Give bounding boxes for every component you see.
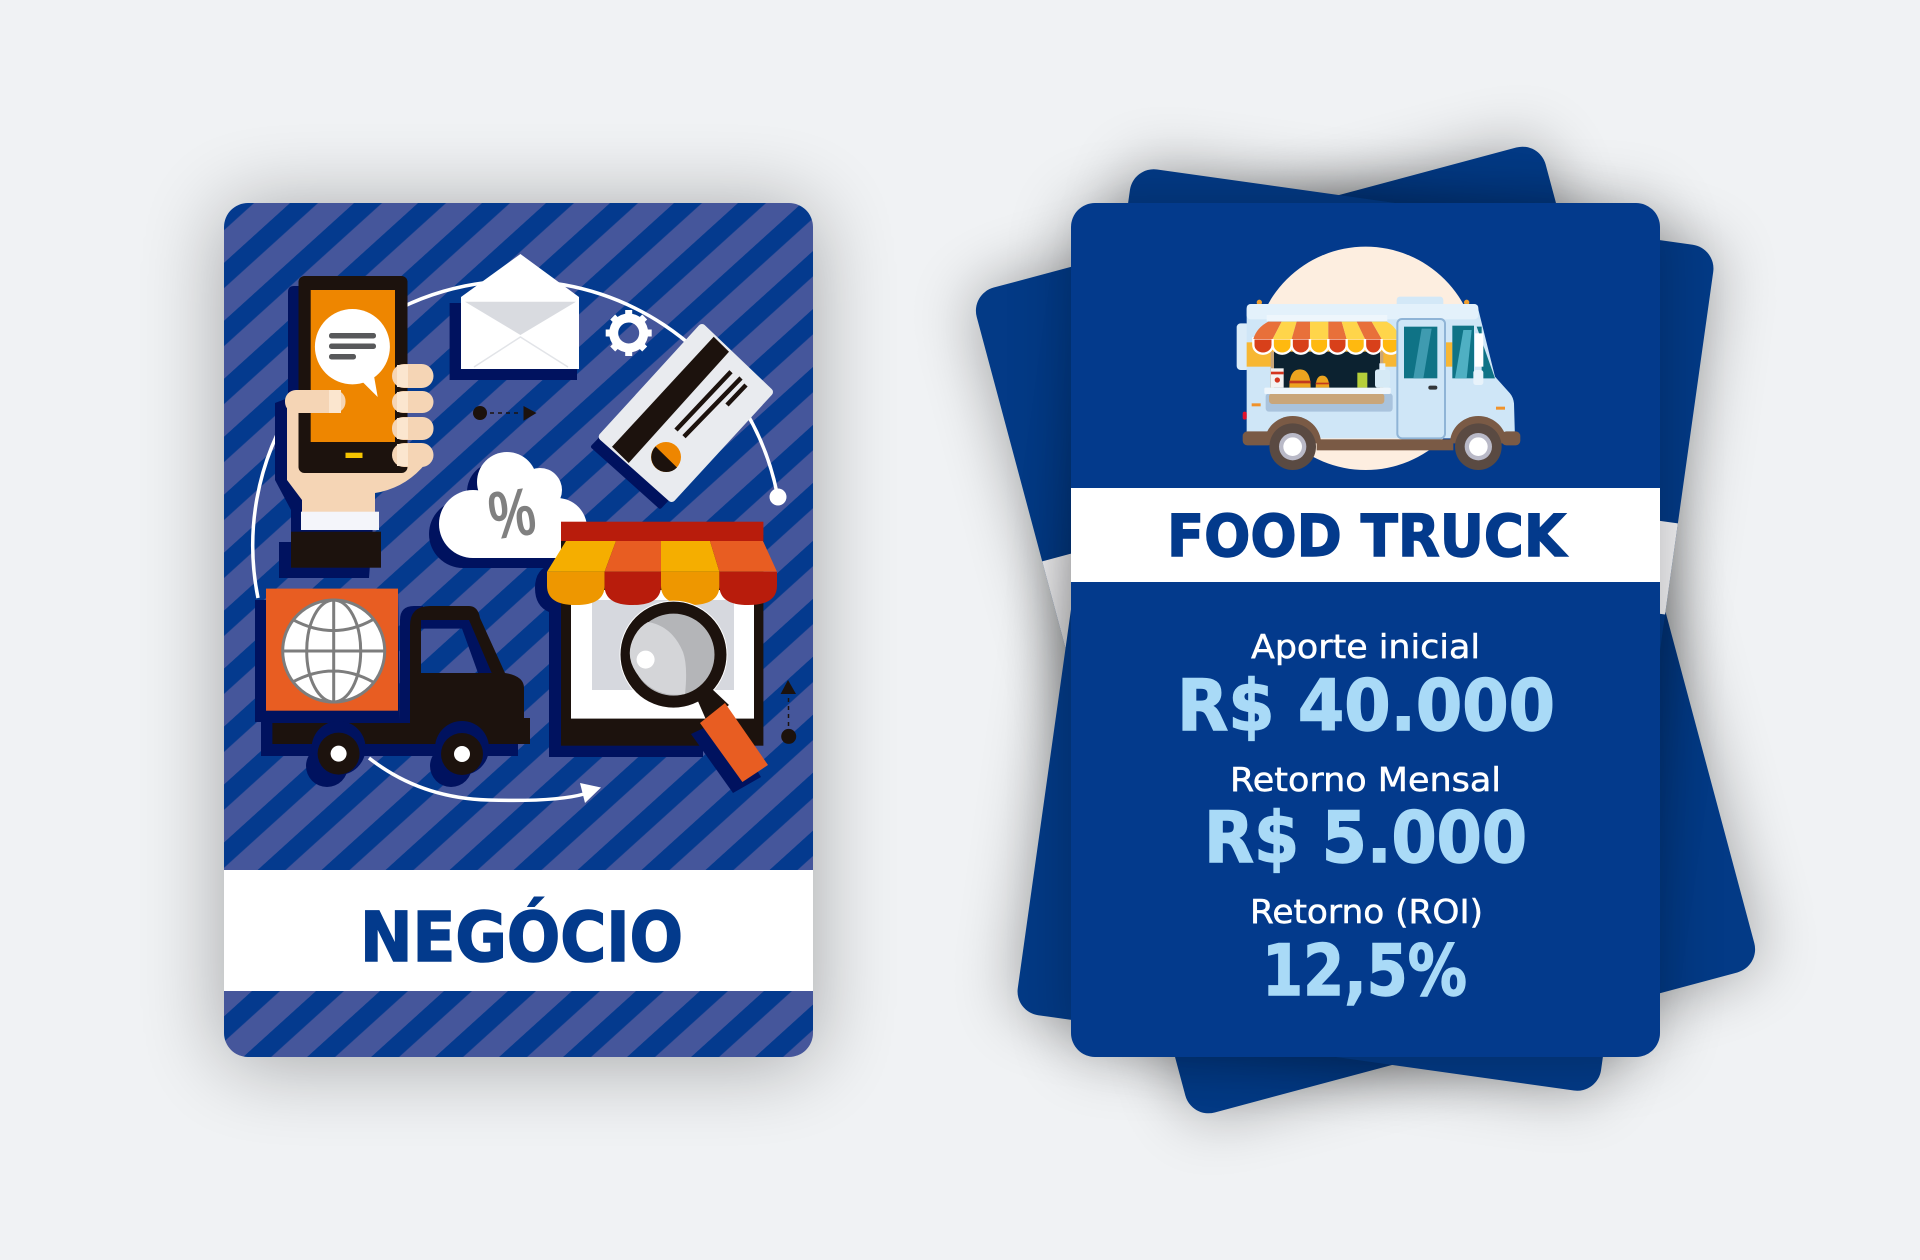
text block: aporte inicial: Aporte inicial — [1251, 627, 1480, 666]
title band: negócio — [224, 870, 813, 991]
text block: retorno mensal: R$ 5.000 — [1204, 797, 1527, 879]
title band: food truck — [1071, 488, 1660, 582]
icon: storefront with magnifier — [535, 522, 777, 793]
panel: negócio card — [224, 203, 813, 1062]
text block: retorno mensal — [1204, 760, 1527, 879]
icon: dotted arrow right — [473, 406, 536, 421]
text block: retorno roi: 12,5% — [1262, 930, 1467, 1012]
icon: truck with globe — [255, 589, 530, 787]
icon: cloud with percent: % — [484, 473, 540, 555]
text block: retorno roi: Retorno (ROI) — [1250, 892, 1483, 931]
illustration: business icons — [253, 254, 796, 803]
title band: food truck: FOOD TRUCK — [1167, 502, 1568, 570]
awning — [1253, 322, 1400, 354]
icon: envelope — [450, 254, 579, 380]
icon: gear — [606, 310, 652, 356]
text block: retorno mensal: Retorno Mensal — [1230, 760, 1501, 799]
icon: cloud with percent — [429, 452, 587, 568]
panel: stacked back cards — [971, 141, 1760, 1119]
text block: aporte inicial — [1177, 627, 1555, 747]
text block: aporte inicial: R$ 40.000 — [1177, 665, 1555, 747]
title band: negócio: NEGÓCIO — [360, 896, 683, 978]
icon: credit card — [593, 328, 769, 507]
icon: dotted arrow up — [781, 680, 796, 744]
curved arrow under truck — [369, 758, 601, 803]
icon: smartphone in hand — [275, 276, 434, 578]
panel: food truck card — [1071, 203, 1660, 1057]
text block: retorno roi — [1250, 892, 1483, 1012]
circular arc with dot — [253, 281, 787, 598]
icon: food truck on cream circle — [1237, 247, 1520, 470]
